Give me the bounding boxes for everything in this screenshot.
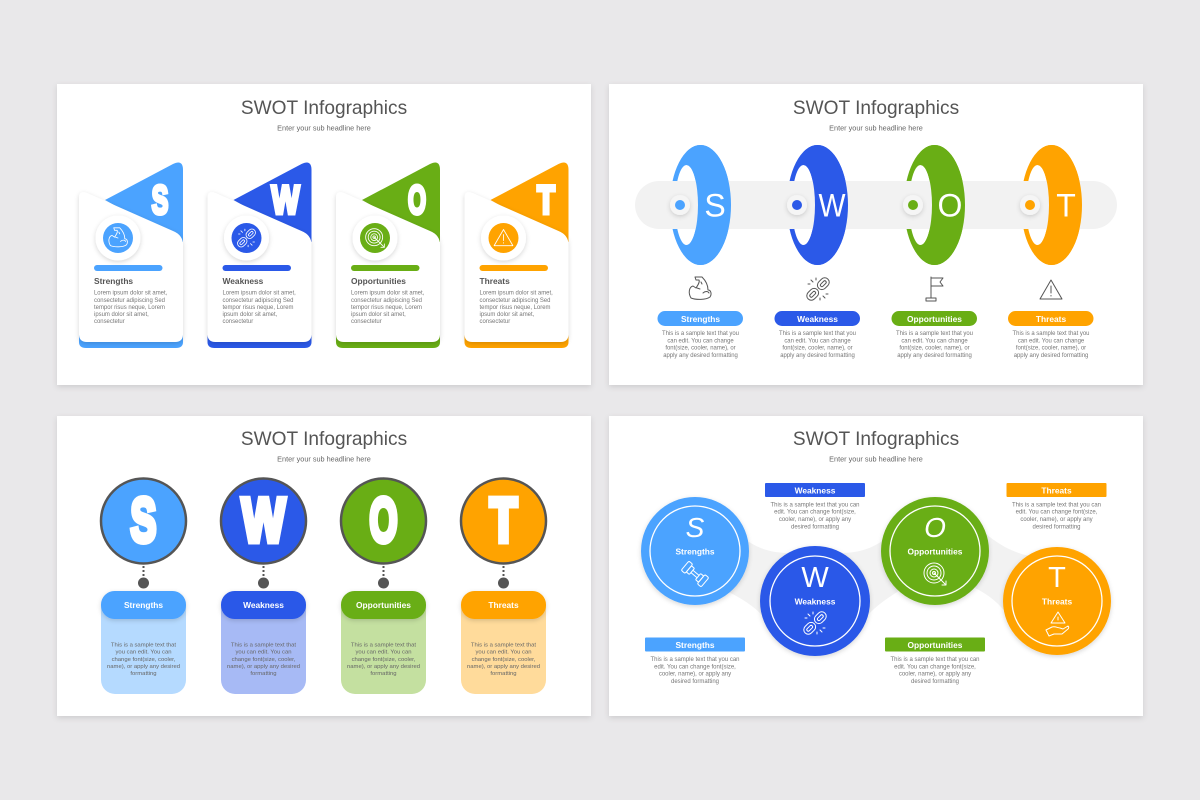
card: Strengths: ipsum dolor sit amet,: [94, 312, 149, 318]
column: Weakness: change font(size, cooler,: [232, 657, 296, 663]
ring front: Strengths: S: [704, 188, 726, 224]
card: Threats: consectetur adipiscing Sed: [480, 298, 550, 304]
label block: Strengths: can edit. You can change: [667, 338, 734, 344]
card: Strengths: consectetur: [94, 319, 125, 325]
icon: flexed arm: [689, 277, 711, 299]
card: Opportunities: tempor risus neque, Lorem: [351, 305, 422, 311]
heading: SWOT Infographics: [793, 429, 959, 450]
circle: Weakness: Weakness: [795, 596, 836, 606]
column: Threats: Threats: [488, 600, 519, 610]
card: Strengths: [79, 162, 183, 348]
card: Weakness: consectetur: [222, 319, 253, 325]
column: Opportunities: you can edit. You can: [355, 650, 412, 656]
heading: SWOT Infographics: [793, 98, 959, 119]
label block: Opportunities: cooler, name), or apply any: [899, 672, 971, 678]
label block: Opportunities: Opportunities: [907, 314, 962, 324]
label block: Opportunities: apply any desired formatting: [897, 353, 972, 359]
card: Strengths: tempor risus neque, Lorem: [94, 305, 165, 311]
circle: Weakness: W: [801, 562, 829, 594]
label block: Weakness: [765, 483, 865, 530]
icon: broken chain: [805, 276, 831, 302]
card: Weakness: Weakness: [222, 276, 264, 286]
label block: Threats: desired formatting: [1032, 524, 1081, 530]
heading: SWOT Infographics: [241, 98, 407, 119]
label block: Strengths: edit. You can change font(size,: [654, 664, 736, 670]
label block: Threats: This is a sample text that you can: [1012, 502, 1101, 508]
panel: SWOT interlocked rings: [609, 84, 1143, 385]
circle: Strengths: Strengths: [675, 546, 715, 556]
label block: Threats: edit. You can change font(size,: [1016, 510, 1098, 516]
label block: Opportunities: desired formatting: [911, 679, 959, 685]
card: Weakness: Lorem ipsum dolor sit amet,: [222, 290, 296, 296]
panel: SWOT connected circles: [609, 416, 1143, 716]
column: Weakness: W: [242, 486, 286, 555]
ring front: Opportunities: O: [938, 188, 962, 224]
card: Threats: [464, 162, 568, 348]
card: Strengths: Lorem ipsum dolor sit amet,: [94, 290, 168, 296]
label block: Strengths: desired formatting: [671, 679, 719, 685]
label block: Weakness: cooler, name), or apply any: [779, 517, 851, 523]
column: Weakness: [221, 478, 306, 694]
label block: Threats: [1006, 483, 1106, 530]
column: Threats: change font(size, cooler,: [472, 657, 536, 663]
label block: Weakness: apply any desired formatting: [780, 353, 855, 359]
label block: Weakness: edit. You can change font(size,: [774, 510, 856, 516]
circle: Threats: T: [1048, 562, 1066, 594]
subheading: Enter your sub headline here: [277, 124, 371, 132]
label block: Opportunities: can edit. You can change: [901, 338, 968, 344]
column: Weakness: name), or apply any desired: [227, 664, 300, 670]
column: Strengths: you can edit. You can: [115, 650, 172, 656]
label block: Threats: [1008, 311, 1094, 359]
subheading: Enter your sub headline here: [829, 124, 923, 132]
column: Opportunities: name), or apply any desired: [347, 664, 420, 670]
label block: Strengths: This is a sample text that you can: [650, 657, 740, 663]
column: Threats: name), or apply any desired: [467, 664, 540, 670]
column: Strengths: [101, 478, 186, 694]
column: Weakness: Weakness: [243, 600, 284, 610]
label block: Strengths: Strengths: [675, 640, 715, 650]
card: Strengths: consectetur adipiscing Sed: [94, 298, 165, 304]
card: Opportunities: Opportunities: [351, 276, 406, 286]
column: Opportunities: formatting: [370, 671, 397, 677]
label block: Threats: font(size, cooler, name), or: [1016, 346, 1086, 352]
label block: Opportunities: This is a sample text that you can: [890, 657, 980, 663]
label block: Weakness: desired formatting: [791, 524, 839, 530]
column: Opportunities: change font(size, cooler,: [352, 657, 416, 663]
rings behind the band: [670, 145, 1082, 265]
ring front: Opportunities: [903, 145, 965, 265]
card: Threats: ipsum dolor sit amet,: [480, 312, 535, 318]
column: Opportunities: This is a sample text that: [351, 642, 416, 648]
column: Weakness: formatting: [250, 671, 277, 677]
label block: Opportunities: This is a sample text that you: [896, 331, 973, 337]
subheading: Enter your sub headline here: [829, 454, 923, 464]
icon: warning: [1040, 280, 1062, 299]
column: Threats: T: [490, 486, 517, 555]
card: Opportunities: consectetur adipiscing Sed: [351, 298, 422, 304]
card: Threats: tempor risus neque, Lorem: [480, 305, 551, 311]
label block: Strengths: apply any desired formatting: [663, 353, 738, 359]
label block: Strengths: [645, 638, 745, 685]
card: Strengths: Strengths: [94, 276, 133, 286]
label block: Weakness: font(size, cooler, name), or: [782, 346, 853, 352]
column: Strengths: change font(size, cooler,: [112, 657, 176, 663]
label block: Weakness: Weakness: [795, 486, 836, 496]
grey band: [635, 181, 1117, 229]
label block: Weakness: This is a sample text that you: [779, 331, 856, 337]
label block: Threats: Threats: [1041, 486, 1072, 496]
circle: Threats: Threats: [1042, 596, 1072, 606]
infographic slide sheet: [56, 84, 1144, 720]
icon: flag: [926, 277, 943, 301]
column: Threats: [461, 478, 546, 694]
column: Weakness: This is a sample text that: [231, 642, 296, 648]
ring front: Weakness: W: [818, 188, 846, 224]
column: Strengths: formatting: [130, 671, 157, 677]
label block: Opportunities: edit. You can change font(size,: [894, 664, 976, 670]
column: Threats: formatting: [490, 671, 517, 677]
circle: Opportunities: Opportunities: [908, 546, 963, 556]
label block: Weakness: Weakness: [797, 314, 838, 324]
subheading: Enter your sub headline here: [277, 454, 371, 464]
card: Threats: T: [537, 178, 555, 223]
ring front: Threats: [1020, 145, 1082, 265]
circle: Strengths: S: [686, 512, 705, 543]
card: Weakness: tempor risus neque, Lorem: [222, 305, 294, 311]
column: Strengths: This is a sample text that: [111, 642, 176, 648]
card: Weakness: W: [272, 178, 300, 223]
column: Opportunities: [341, 478, 426, 694]
card: Threats: consectetur: [480, 319, 510, 325]
label block: Strengths: [658, 311, 743, 359]
label block: Strengths: Strengths: [681, 314, 720, 324]
circle: Threats: [1003, 547, 1111, 655]
label block: Opportunities: [885, 638, 985, 685]
ring front: Threats: T: [1056, 188, 1076, 224]
panel: SWOT hanging circles: [57, 416, 591, 716]
connector band: [725, 533, 1030, 625]
column: Strengths: name), or apply any desired: [107, 664, 180, 670]
label block: Weakness: [774, 311, 860, 359]
card: Opportunities: Lorem ipsum dolor sit amet,: [351, 290, 425, 296]
card: Strengths: S: [152, 179, 168, 223]
label block: Threats: apply any desired formatting: [1014, 353, 1088, 359]
label block: Opportunities: Opportunities: [908, 640, 963, 650]
label block: Threats: This is a sample text that you: [1013, 331, 1089, 337]
column: Weakness: you can edit. You can: [235, 650, 292, 656]
label block: Opportunities: font(size, cooler, name), or: [899, 346, 970, 352]
label block: Weakness: can edit. You can change: [784, 338, 851, 344]
column: Threats: This is a sample text that: [471, 642, 536, 648]
ring front: Strengths: [670, 145, 731, 265]
card: Weakness: [208, 162, 312, 348]
circle: Weakness: [760, 546, 870, 656]
label block: Strengths: This is a sample text that you: [662, 331, 739, 337]
circle: Opportunities: [881, 497, 989, 605]
card: Threats: Lorem ipsum dolor sit amet,: [480, 290, 553, 296]
card: Opportunities: ipsum dolor sit amet,: [351, 312, 406, 318]
label block: Strengths: font(size, cooler, name), or: [665, 346, 736, 352]
column: Strengths: S: [131, 485, 156, 555]
label block: Threats: cooler, name), or apply any: [1020, 517, 1093, 523]
panel: SWOT folded cards: [57, 84, 591, 385]
label block: Weakness: This is a sample text that you can: [770, 502, 860, 508]
column: Threats: you can edit. You can: [475, 650, 532, 656]
label block: Strengths: cooler, name), or apply any: [659, 672, 731, 678]
card: Opportunities: consectetur: [351, 319, 382, 325]
column: Opportunities: O: [370, 485, 397, 555]
label block: Opportunities: [892, 311, 977, 359]
card: Weakness: consectetur adipiscing Sed: [222, 298, 293, 304]
label block: Threats: can edit. You can change: [1018, 338, 1085, 344]
ring front: Weakness: [787, 145, 848, 265]
column: Strengths: Strengths: [124, 600, 163, 610]
card: Opportunities: O: [408, 177, 426, 222]
card: Threats: Threats: [480, 276, 510, 286]
card: Weakness: ipsum dolor sit amet,: [222, 312, 278, 318]
card: Opportunities: [336, 162, 440, 348]
circle: Opportunities: O: [924, 512, 946, 543]
heading: SWOT Infographics: [241, 429, 407, 450]
circle: Strengths: [641, 497, 749, 605]
label block: Threats: Threats: [1036, 314, 1066, 324]
column: Opportunities: Opportunities: [356, 600, 411, 610]
